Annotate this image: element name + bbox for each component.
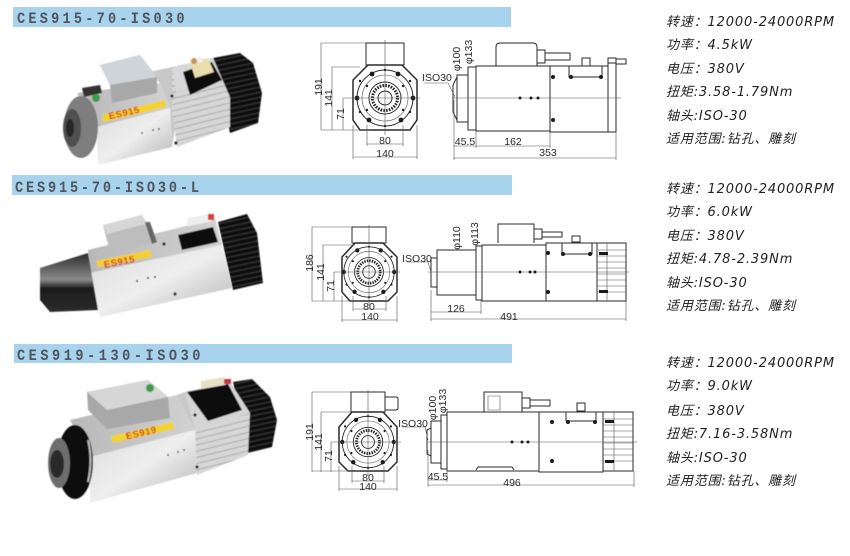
drawing: side view 1: φ100	[451, 47, 463, 71]
drawing: front view 1: 71	[335, 108, 347, 120]
specs: CES915-70-ISO30-L	[666, 182, 835, 314]
drawing: front view 3: 140	[359, 481, 377, 493]
drawing: side view 1	[422, 40, 626, 160]
specs: CES915-70-IS030: 转速：12000-24000RPM	[666, 15, 835, 30]
drawing: front view 3: 191	[304, 423, 316, 441]
drawing: side view 2: φ110	[451, 226, 463, 250]
heading: CES915-70-ISO30-L: CES915-70-ISO30-L	[15, 180, 202, 197]
drawing: side view 3	[398, 389, 637, 489]
specs: CES919-130-ISO30	[666, 356, 835, 489]
drawing: front view 1: 141	[323, 89, 335, 107]
heading: CES915-70-ISO30-L	[12, 175, 512, 197]
photo: CES915-70-IS030 spindle: ES915	[108, 105, 141, 122]
specs: CES915-70-ISO30-L: 扭矩:4.78-2.39Nm	[666, 252, 793, 267]
specs: CES919-130-ISO30: 功率：9.0kW	[666, 378, 753, 394]
drawing: front view 1	[313, 40, 420, 160]
drawing: front view 1: 140	[376, 148, 394, 160]
drawing: front view 1: 191	[313, 78, 325, 96]
specs: CES919-130-ISO30: 转速：12000-24000RPM	[666, 356, 835, 371]
specs: CES915-70-ISO30-L: 转速：12000-24000RPM	[666, 182, 835, 197]
drawing: side view 2: 491	[500, 311, 518, 323]
drawing: side view 2: ISO30	[402, 253, 432, 265]
drawing: side view 2: 126	[447, 303, 465, 315]
drawing: front view 3	[304, 390, 401, 493]
drawing: side view 2	[402, 222, 629, 323]
photo: CES919-130-ISO30 spindle	[48, 377, 277, 503]
drawing: side view 3: φ133	[437, 389, 449, 413]
specs: CES915-70-IS030: 功率：4.5kW	[666, 37, 753, 53]
specs: CES919-130-ISO30: 扭矩:7.16-3.58Nm	[666, 427, 793, 442]
drawing: front view 2: 80	[363, 301, 375, 313]
heading: CES919-130-ISO30: CES919-130-ISO30	[17, 348, 204, 365]
specs: CES915-70-IS030: 适用范围:钻孔、雕刻	[666, 132, 797, 147]
drawing: side view 1: 162	[504, 136, 522, 148]
photo: CES919-130-ISO30 spindle: ES919	[125, 425, 158, 442]
drawing: side view 2: φ113	[469, 222, 481, 246]
specs: CES919-130-ISO30: 电压：380V	[666, 404, 745, 419]
drawing: side view 3: φ100	[427, 396, 439, 420]
drawing: side view 3: ISO30	[398, 418, 428, 430]
drawing: front view 2: 186	[304, 254, 316, 272]
drawing: side view 3: 45.5	[428, 471, 448, 483]
drawing: front view 1: 80	[379, 135, 391, 147]
heading: CES919-130-ISO30	[14, 344, 512, 365]
drawing: front view 2: 140	[361, 311, 379, 323]
heading: CES915-70-IS030: CES915-70-IS030	[17, 11, 188, 28]
specs: CES915-70-ISO30-L: 适用范围:钻孔、雕刻	[666, 299, 797, 314]
drawing: side view 1: 353	[539, 147, 557, 159]
photo: CES915-70-ISO30-L spindle	[40, 214, 263, 317]
drawing: front view 2: 141	[315, 263, 327, 281]
drawing: front view 3: 141	[313, 433, 325, 451]
specs: CES919-130-ISO30: 适用范围:钻孔、雕刻	[666, 474, 797, 489]
drawing: front view 2: 71	[325, 280, 337, 292]
drawing: side view 1: 45.5	[455, 136, 475, 148]
drawing: front view 3: 71	[323, 450, 335, 462]
heading: CES915-70-IS030	[13, 7, 511, 28]
specs: CES915-70-IS030: 扭矩:3.58-1.79Nm	[666, 85, 793, 100]
photo: CES915-70-ISO30-L spindle: ES915	[103, 254, 136, 271]
drawing: side view 3: 496	[503, 477, 521, 489]
drawing: front view 3: 80	[362, 472, 374, 484]
specs: CES915-70-IS030: 电压：380V	[666, 62, 745, 77]
drawing: side view 1: φ133	[463, 40, 475, 64]
specs: CES915-70-ISO30-L: 电压：380V	[666, 229, 745, 244]
specs: CES919-130-ISO30: 轴头:ISO-30	[666, 451, 748, 466]
drawing: side view 1: ISO30	[422, 72, 452, 84]
specs: CES915-70-IS030	[666, 15, 835, 147]
photo: CES915-70-IS030 spindle	[63, 53, 262, 165]
specs: CES915-70-IS030: 轴头:ISO-30	[666, 109, 748, 124]
drawing: front view 2	[304, 225, 400, 323]
specs: CES915-70-ISO30-L: 功率：6.0kW	[666, 204, 753, 220]
specs: CES915-70-ISO30-L: 轴头:ISO-30	[666, 276, 748, 291]
